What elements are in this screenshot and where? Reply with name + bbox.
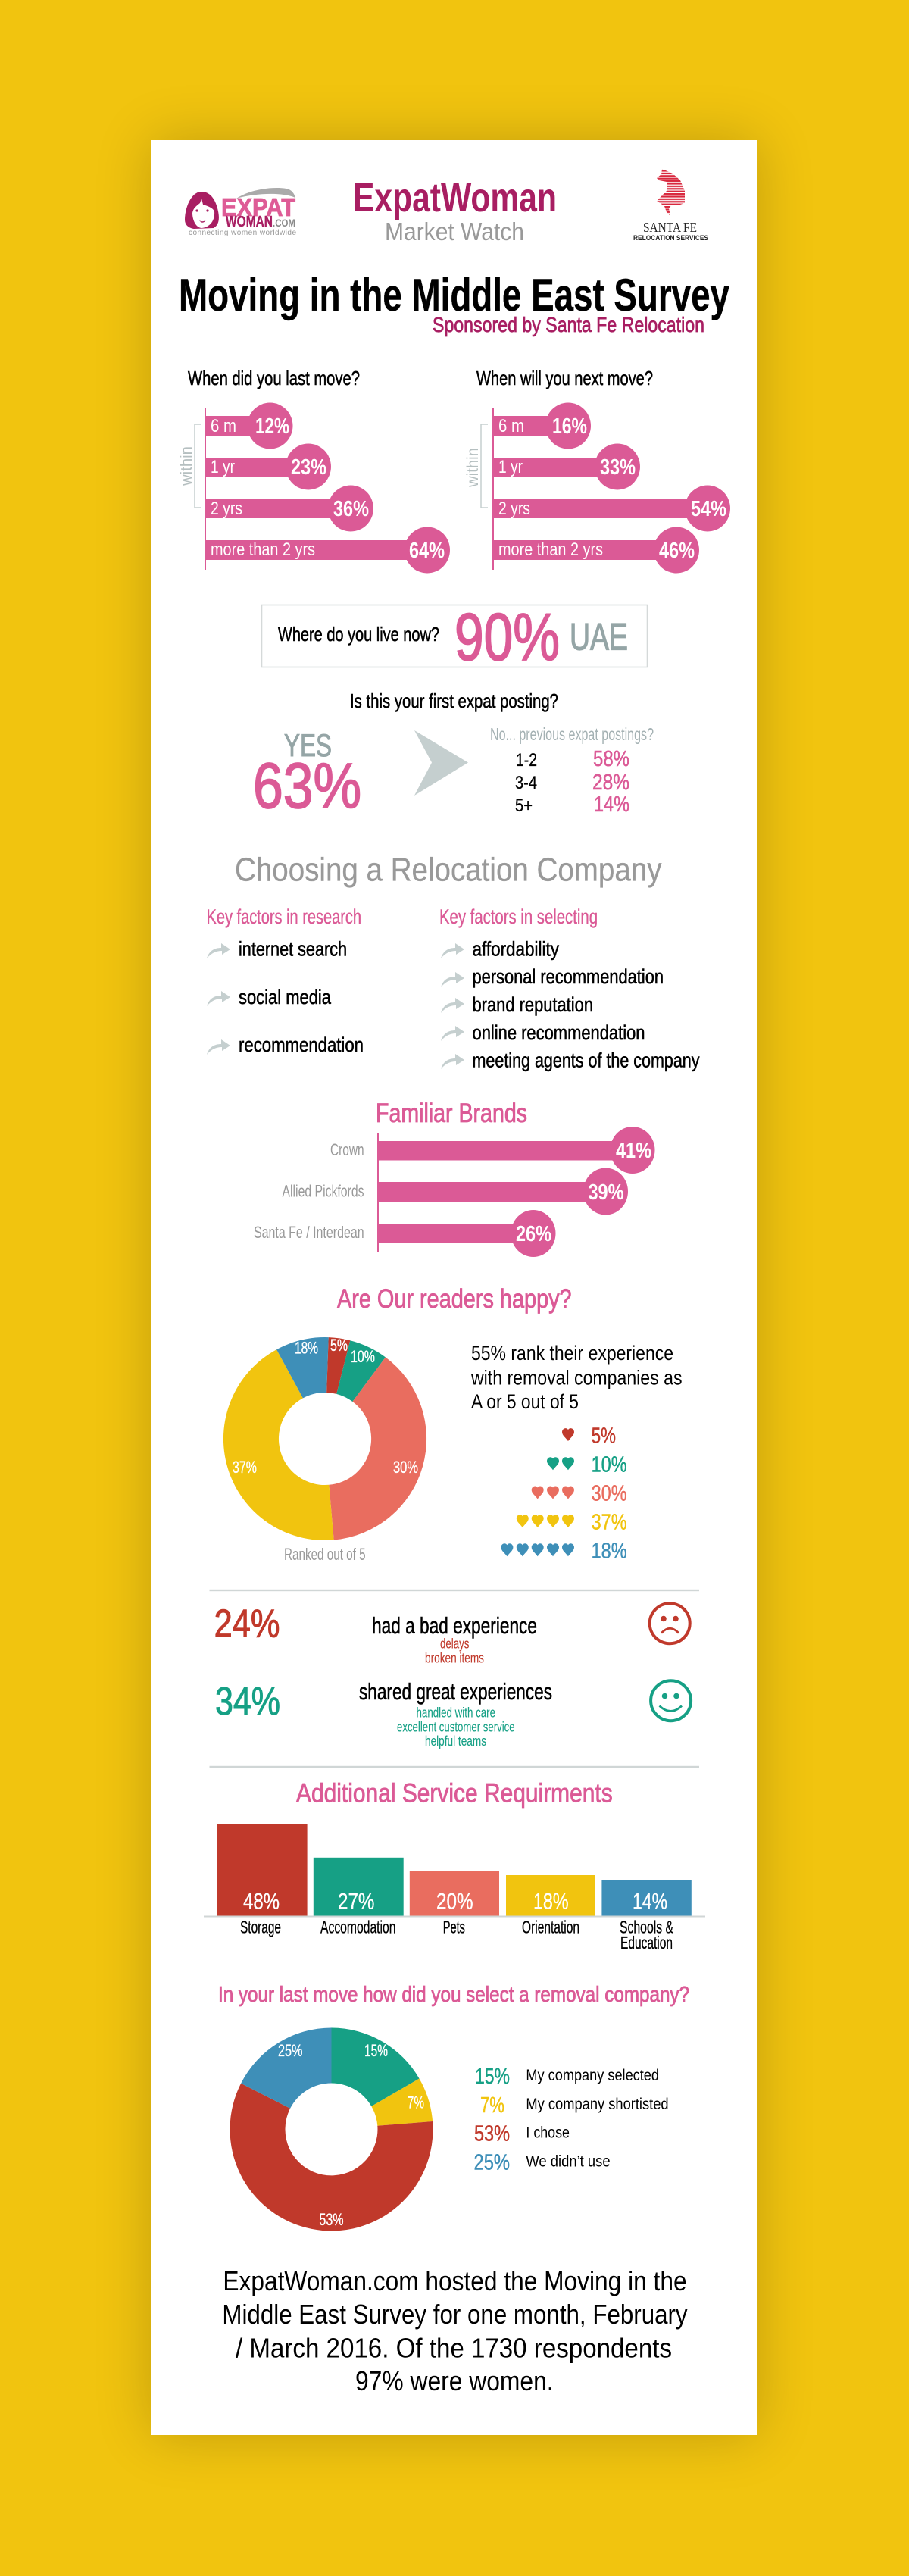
- donut caption: Ranked out of 5: [284, 1545, 366, 1564]
- heading: In your last move how did you select a removal company?: [218, 1983, 689, 2007]
- reasons: handled with care: [417, 1705, 495, 1720]
- bar chart: 64%: [409, 539, 445, 563]
- heading: When will you next move?: [476, 367, 653, 389]
- list: key factors in research: [206, 905, 364, 1056]
- bar chart: 14%: [633, 1890, 667, 1914]
- bar chart: 20%: [436, 1890, 473, 1914]
- donut chart: ranked out of 5: 5%: [330, 1336, 348, 1355]
- list: key factors in research: social media: [239, 986, 332, 1008]
- donut chart: ranked out of 5: 30%: [393, 1458, 418, 1477]
- reasons: [425, 1637, 484, 1665]
- list: key factors in selecting: affordability: [473, 938, 559, 961]
- bar chart: [205, 403, 450, 573]
- closing text: / March 2016. Of the 1730 respondents: [236, 2332, 672, 2363]
- hearts legend: 18%: [592, 1540, 627, 1564]
- sponsor line: Sponsored by Santa Fe Relocation: [433, 313, 704, 336]
- bar chart: Schools &: [620, 1918, 673, 1937]
- legend: 7%: [480, 2093, 504, 2118]
- label: had a bad experience: [372, 1612, 537, 1639]
- panel: first expat posting: [253, 689, 654, 821]
- bar chart: 27%: [338, 1890, 374, 1914]
- hearts legend: 30%: [592, 1482, 627, 1506]
- heading: When did you last move?: [188, 367, 360, 389]
- list: key factors in research: Key factors in research: [206, 905, 361, 928]
- donut chart: 7%: [408, 2093, 424, 2112]
- list: key factors in research: recommendation: [239, 1033, 364, 1056]
- hearts legend: 10%: [592, 1453, 627, 1477]
- donut chart: 53%: [319, 2210, 344, 2229]
- bar chart: more than 2 yrs: [211, 539, 315, 560]
- arrow: [414, 730, 468, 796]
- bar chart: 48%: [243, 1890, 280, 1914]
- bar chart: 54%: [691, 497, 726, 521]
- yes stat: 63%: [253, 750, 361, 821]
- bar chart: Education: [620, 1933, 673, 1952]
- legend: 15%: [475, 2065, 510, 2089]
- heading: Additional Service Requirments: [296, 1779, 613, 1808]
- previous postings table: No... previous expat postings?: [490, 724, 654, 744]
- logo: ExpatWoman.com: connecting women worldwide: [189, 229, 296, 237]
- legend: 25%: [474, 2151, 510, 2175]
- text block: [470, 1342, 682, 1413]
- bar chart: Pets: [443, 1918, 465, 1937]
- donut chart: ranked out of 5: 18%: [295, 1338, 318, 1357]
- stat: 24%: [214, 1602, 280, 1646]
- legend: We didn’t use: [526, 2153, 611, 2171]
- legend: My company selected: [526, 2067, 659, 2084]
- text block: with removal companies as: [470, 1367, 682, 1390]
- donut chart: ranked out of 5: [223, 1336, 426, 1540]
- hearts legend: 37%: [592, 1511, 627, 1535]
- legend: My company shortisted: [526, 2096, 669, 2113]
- logo: Santa Fe: SANTA FE: [643, 220, 697, 235]
- bar chart: Accomodation: [320, 1918, 395, 1937]
- bar chart: 36%: [333, 497, 369, 521]
- panel: when did you last move: [178, 367, 450, 573]
- label: shared great experiences: [359, 1678, 552, 1705]
- question: Is this your first expat posting?: [350, 689, 558, 712]
- subtitle: Market Watch: [385, 217, 524, 245]
- panel: when will you next move: [464, 367, 730, 573]
- legend: 53%: [474, 2122, 510, 2146]
- bar chart: 16%: [552, 414, 587, 439]
- header: [185, 169, 708, 245]
- logo: ExpatWoman.com: EXPAT: [221, 193, 295, 221]
- reasons: [397, 1705, 515, 1749]
- callout: where do you live: 90%: [454, 599, 560, 674]
- bar chart: [254, 1127, 654, 1257]
- bar chart: more than 2 yrs: [498, 539, 603, 560]
- panel: great experience: [215, 1678, 691, 1749]
- list: key factors in selecting: online recommendation: [473, 1021, 645, 1044]
- within bracket: [178, 424, 201, 508]
- legend: I chose: [526, 2124, 570, 2142]
- bar chart: 23%: [291, 455, 326, 480]
- logo: ExpatWoman.com: WOMAN: [226, 214, 273, 230]
- donut chart: ranked out of 5: 10%: [351, 1347, 375, 1366]
- donut chart: 15%: [364, 2041, 388, 2060]
- closing text: ExpatWoman.com hosted the Moving in the: [223, 2265, 687, 2296]
- callout: where do you live: Where do you live now?: [278, 623, 439, 646]
- reasons: excellent customer service: [397, 1720, 515, 1735]
- list: key factors in research: internet search: [239, 938, 347, 961]
- list: key factors in selecting: brand reputation: [473, 993, 593, 1016]
- logo: Santa Fe: [633, 169, 708, 242]
- panel: are our readers happy: [223, 1284, 683, 1564]
- bar chart: 12%: [255, 414, 289, 439]
- heading: Familiar Brands: [376, 1099, 527, 1128]
- icon: sad face: [650, 1603, 690, 1643]
- bar chart: 18%: [533, 1890, 568, 1914]
- reasons: broken items: [425, 1650, 484, 1665]
- reasons: delays: [440, 1637, 469, 1652]
- stat: 34%: [215, 1680, 280, 1724]
- bar chart: Santa Fe / Interdean: [254, 1223, 364, 1242]
- logo: Santa Fe: RELOCATION SERVICES: [633, 234, 708, 242]
- text block: 55% rank their experience: [471, 1342, 673, 1365]
- main title: Moving in the Middle East Survey: [179, 270, 729, 320]
- closing text: Middle East Survey for one month, February: [222, 2299, 688, 2330]
- bar chart: 39%: [588, 1180, 624, 1205]
- bar chart: 1 yr: [211, 457, 235, 477]
- previous postings table: 58%: [593, 747, 629, 771]
- bar chart: 2 yrs: [211, 499, 242, 519]
- panel: bad experience: [214, 1602, 690, 1665]
- bar chart: Storage: [240, 1918, 281, 1937]
- legend: [474, 2065, 669, 2175]
- donut chart: [230, 2027, 433, 2231]
- reasons: helpful teams: [425, 1733, 486, 1749]
- list: key factors in selecting: Key factors in selecting: [439, 905, 598, 928]
- brand title: ExpatWoman: [353, 175, 557, 220]
- closing text: [222, 2265, 688, 2396]
- bar chart: 33%: [600, 455, 636, 480]
- panel: familiar brands: [254, 1099, 654, 1257]
- bar chart: 46%: [659, 539, 695, 563]
- heading: choosing a relocation company: Choosing a Relocation Company: [235, 852, 662, 888]
- within bracket: [464, 424, 488, 508]
- bar chart: 41%: [616, 1139, 651, 1163]
- bar chart: 26%: [516, 1222, 551, 1246]
- list: key factors in selecting: personal recommendation: [473, 965, 664, 988]
- donut chart: ranked out of 5: 37%: [233, 1458, 257, 1477]
- text block: A or 5 out of 5: [471, 1390, 579, 1413]
- bar chart: 1 yr: [498, 457, 523, 477]
- callout: where do you live: UAE: [570, 615, 628, 658]
- bar chart: [204, 1824, 705, 1952]
- previous postings table: 1-2: [516, 750, 537, 771]
- logo: ExpatWoman.com: [185, 188, 296, 237]
- previous postings table: 28%: [592, 771, 629, 795]
- within bracket: within: [464, 448, 482, 488]
- bar chart: 6 m: [498, 416, 524, 436]
- callout: where do you live: [262, 599, 647, 674]
- white panel card: [152, 140, 758, 2435]
- heading: Are Our readers happy?: [337, 1284, 572, 1314]
- yes stat: YES: [284, 727, 332, 763]
- bar chart: Allied Pickfords: [282, 1182, 364, 1201]
- list: key factors in selecting: meeting agents of the company: [473, 1049, 700, 1071]
- hearts legend: 5%: [592, 1424, 616, 1448]
- donut chart: 25%: [278, 2041, 303, 2060]
- hearts legend: [501, 1424, 627, 1564]
- previous postings table: 3-4: [515, 773, 537, 793]
- previous postings table: [490, 724, 654, 817]
- previous postings table: 5+: [515, 796, 533, 816]
- panel: additional service requirements: [204, 1779, 705, 1952]
- bar chart: 2 yrs: [498, 499, 530, 519]
- panel: how did you select: [218, 1983, 689, 2231]
- bar chart: [492, 403, 730, 573]
- logo: ExpatWoman.com: .COM: [273, 217, 295, 229]
- yes stat: [253, 727, 361, 821]
- within bracket: within: [178, 446, 195, 486]
- icon: smiley face: [651, 1680, 691, 1721]
- bar chart: 6 m: [211, 416, 236, 436]
- list: key factors in selecting: [439, 905, 700, 1071]
- closing text: 97% were women.: [355, 2365, 554, 2396]
- previous postings table: 14%: [594, 792, 629, 817]
- bar chart: Orientation: [522, 1918, 579, 1937]
- bar chart: Crown: [330, 1140, 364, 1159]
